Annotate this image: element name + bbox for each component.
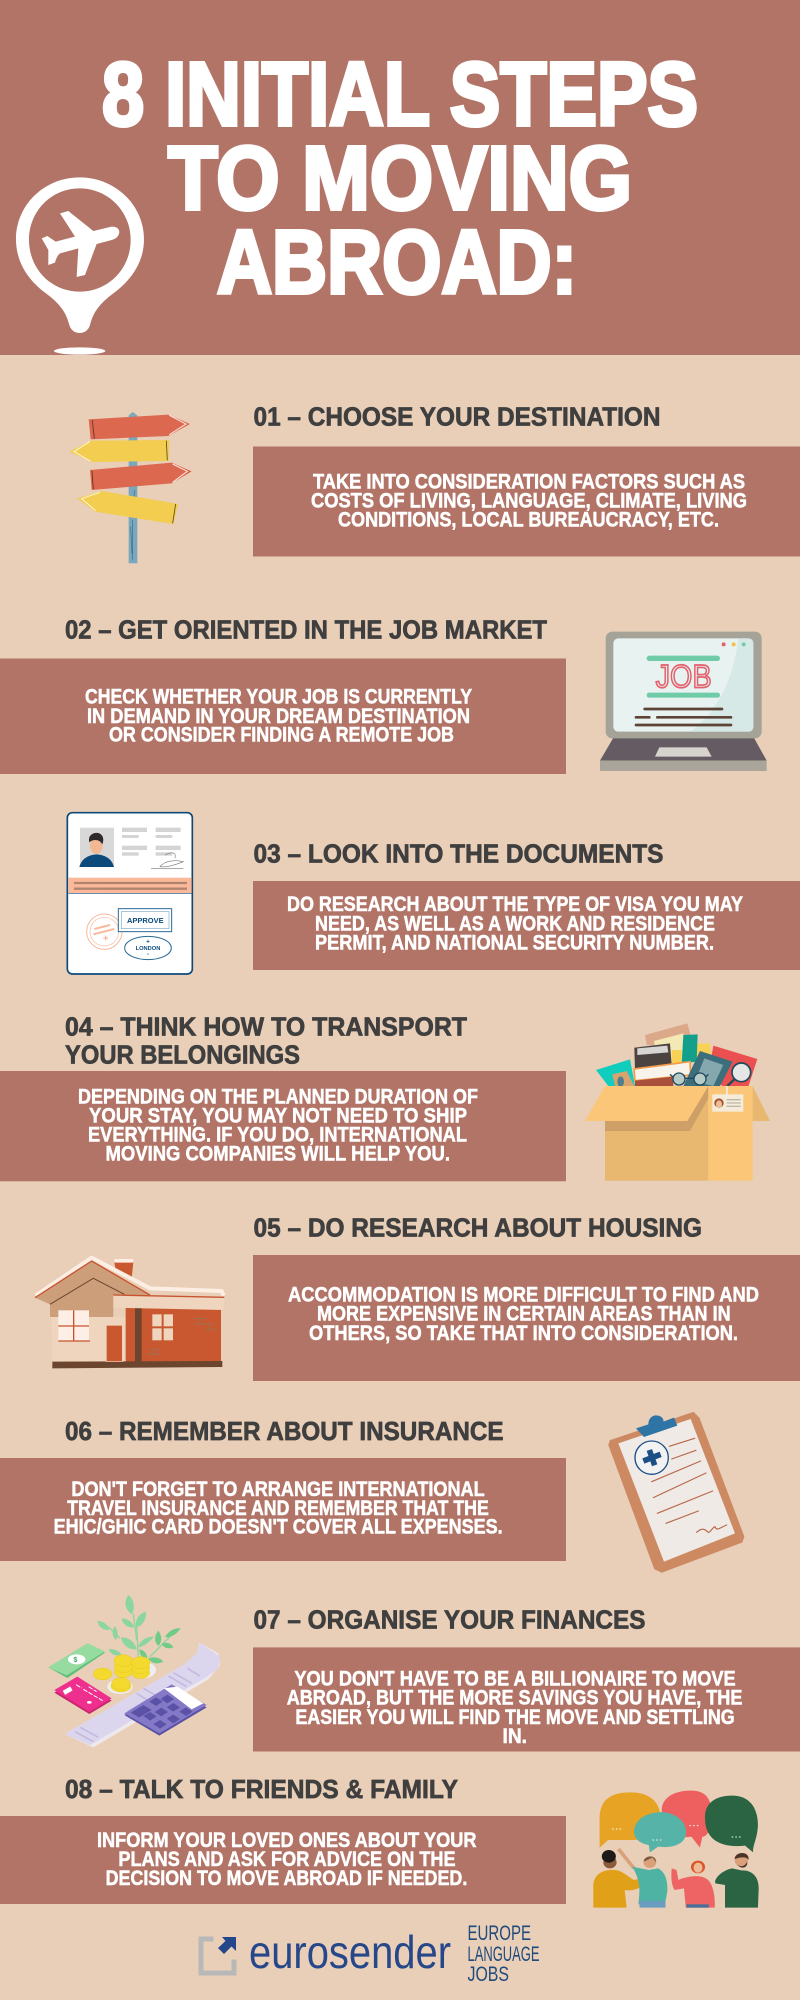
text box 04: DEPENDING ON THE PLANNED DURATION OF bbox=[78, 1085, 478, 1108]
logo: Europe Language Jobs: JOBS bbox=[468, 1963, 509, 1986]
text box 07 bbox=[253, 1647, 800, 1752]
step 03 bbox=[67, 813, 800, 974]
text box 07: YOU DON'T HAVE TO BE A BILLIONAIRE TO MOVE bbox=[294, 1668, 736, 1691]
heading 08: 08 – TALK TO FRIENDS & FAMILY bbox=[65, 1774, 458, 1804]
title: ABROAD: bbox=[217, 213, 577, 313]
step 07 bbox=[48, 1595, 800, 1752]
text box 02 bbox=[0, 658, 566, 774]
icon: medical clipboard bbox=[609, 1413, 743, 1572]
step 01 bbox=[69, 402, 800, 563]
heading 04: 04 – THINK HOW TO TRANSPORT bbox=[65, 1012, 467, 1042]
step 08 bbox=[0, 1774, 759, 1908]
heading 07: 07 – ORGANISE YOUR FINANCES bbox=[254, 1605, 646, 1635]
title: TO MOVING bbox=[168, 129, 632, 229]
text box 08 bbox=[0, 1816, 566, 1904]
text box 08: INFORM YOUR LOVED ONES ABOUT YOUR bbox=[97, 1829, 476, 1852]
icon: passport with stamps: LONDON bbox=[136, 946, 160, 952]
icon: finances with money, card, calculator bbox=[48, 1595, 220, 1747]
step 06 bbox=[0, 1413, 743, 1572]
text box 01 bbox=[253, 446, 800, 556]
text box 01: COSTS OF LIVING, LANGUAGE, CLIMATE, LIVING bbox=[311, 490, 747, 512]
text box 05 bbox=[253, 1255, 800, 1381]
text box 05: MORE EXPENSIVE IN CERTAIN AREAS THAN IN bbox=[317, 1302, 731, 1325]
text box 02: CHECK WHETHER YOUR JOB IS CURRENTLY bbox=[85, 686, 472, 709]
heading 05: 05 – DO RESEARCH ABOUT HOUSING bbox=[254, 1213, 702, 1243]
text box 01: TAKE INTO CONSIDERATION FACTORS SUCH AS bbox=[313, 470, 745, 493]
icon: laptop with job listing bbox=[600, 632, 767, 771]
logo: Europe Language Jobs bbox=[468, 1922, 540, 1986]
text box 03: NEED, AS WELL AS A WORK AND RESIDENCE bbox=[315, 912, 715, 935]
icon: people talking with speech bubbles bbox=[593, 1791, 759, 1908]
logo: Europe Language Jobs: EUROPE bbox=[468, 1922, 531, 1945]
text box 06 bbox=[0, 1458, 566, 1561]
text box 03 bbox=[253, 881, 800, 970]
heading 02: 02 – GET ORIENTED IN THE JOB MARKET bbox=[65, 614, 547, 644]
title: 8 INITIAL STEPS bbox=[102, 45, 698, 145]
icon: passport with stamps bbox=[67, 813, 192, 974]
icon: cardboard box of belongings bbox=[585, 1023, 770, 1181]
text box 06: EHIC/GHIC CARD DOESN'T COVER ALL EXPENSES. bbox=[54, 1516, 503, 1539]
text box 08: PLANS AND ASK FOR ADVICE ON THE bbox=[118, 1848, 456, 1871]
text box 06: TRAVEL INSURANCE AND REMEMBER THAT THE bbox=[67, 1497, 489, 1520]
text box 04 bbox=[0, 1071, 566, 1181]
text box 08: DECISION TO MOVE ABROAD IF NEEDED. bbox=[106, 1867, 467, 1890]
heading 03: 03 – LOOK INTO THE DOCUMENTS bbox=[254, 838, 664, 868]
text box 07: EASIER YOU WILL FIND THE MOVE AND SETTLING bbox=[295, 1706, 735, 1729]
text box 04: YOUR STAY, YOU MAY NOT NEED TO SHIP bbox=[89, 1104, 467, 1127]
text box 02: IN DEMAND IN YOUR DREAM DESTINATION bbox=[87, 705, 470, 728]
heading 06: 06 – REMEMBER ABOUT INSURANCE bbox=[65, 1416, 504, 1446]
text box 04: EVERYTHING. IF YOU DO, INTERNATIONAL bbox=[88, 1124, 467, 1146]
header panel bbox=[0, 0, 800, 355]
logo: eurosender: eurosender bbox=[249, 1926, 451, 1978]
title bbox=[102, 45, 698, 313]
icon: passport with stamps: APPROVE bbox=[127, 916, 164, 925]
text box 03: PERMIT, AND NATIONAL SECURITY NUMBER. bbox=[315, 931, 714, 954]
logos bbox=[199, 1922, 540, 1986]
icon: signpost bbox=[69, 412, 192, 563]
icon: finances with money, card, calculator: $ bbox=[73, 1655, 77, 1664]
text box 01: CONDITIONS, LOCAL BUREAUCRACY, ETC. bbox=[338, 509, 719, 532]
icon: laptop with job listing: JOB bbox=[656, 658, 712, 695]
heading 01: 01 – CHOOSE YOUR DESTINATION bbox=[254, 402, 660, 432]
text box 04: MOVING COMPANIES WILL HELP YOU. bbox=[106, 1143, 450, 1166]
text box 02: OR CONSIDER FINDING A REMOTE JOB bbox=[109, 724, 454, 747]
text box 07: IN. bbox=[502, 1725, 527, 1748]
heading 04: YOUR BELONGINGS bbox=[65, 1039, 300, 1069]
step 05 bbox=[35, 1213, 800, 1381]
logo: Europe Language Jobs: LANGUAGE bbox=[468, 1943, 540, 1966]
step 02 bbox=[0, 614, 767, 774]
icon: house bbox=[35, 1258, 224, 1368]
text box 06: DON'T FORGET TO ARRANGE INTERNATIONAL bbox=[71, 1478, 485, 1501]
text box 05: OTHERS, SO TAKE THAT INTO CONSIDERATION. bbox=[309, 1322, 738, 1345]
icon: location pin with plane bbox=[16, 177, 144, 355]
heading 04 bbox=[65, 1012, 467, 1069]
step 04 bbox=[0, 1012, 770, 1181]
